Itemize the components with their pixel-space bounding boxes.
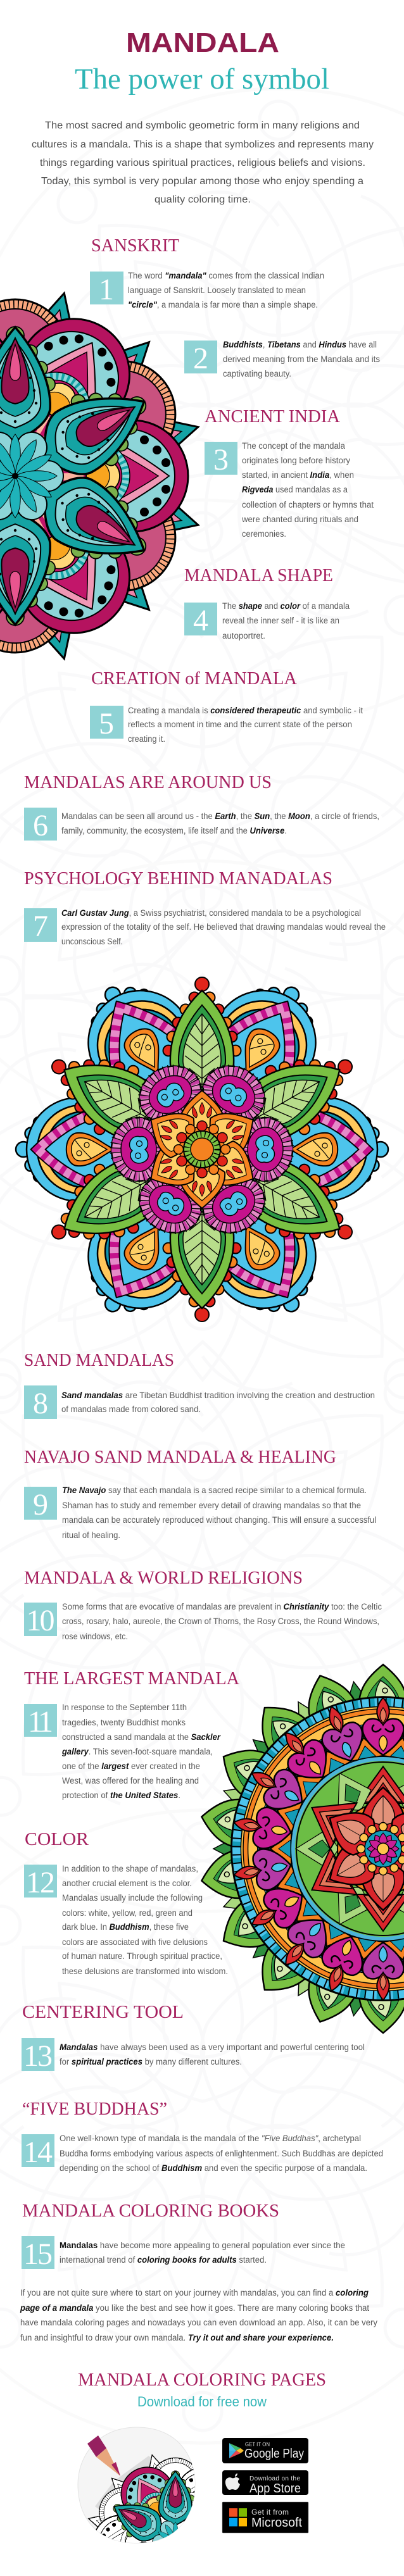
item 9 [24,1485,376,1540]
heading: Sand mandalas: SAND MANDALAS [24,1350,174,1370]
item 14: Buddha forms embodying various aspects of enlightenment. Such Buddhas are depicted [60,2149,383,2158]
item 6: Mandalas can be seen all around us - the Earth, the Sun, the Moon, a circle of friends, [61,811,379,821]
item 13: for spiritual practices by many different cultures. [60,2057,242,2066]
closing paragraph: page of a mandala you like the best and see how it goes. There are many coloring books that [20,2303,369,2313]
heading: Creation of mandala: CREATION of MANDALA [91,668,297,689]
item 11: tragedies, twenty Buddhist monks [62,1718,186,1727]
item 12: 12 [26,1866,55,1899]
item 11: protection of the United States. [62,1791,180,1800]
heading: Sanskrit: SANSKRIT [91,235,179,256]
item 12: these delusions are transformed into wisdom. [62,1966,228,1976]
icon: pencil [87,2435,120,2476]
item 8: 8 [33,1387,48,1420]
badge: Google Play: Google Play [244,2447,304,2461]
item 3: were chanted during rituals and [241,515,358,524]
item 14: One well-known type of mandala is the mandala of the "Five Buddhas", archetypal [60,2134,361,2143]
item 4: autoportret. [222,631,265,641]
intro paragraph: Today, this symbol is very popular among those who enjoy spending a [41,176,363,187]
item 11: one of the largest ever created in the [62,1761,200,1771]
item 1: "circle", a mandala is far more than a simple shape. [128,300,318,309]
item 7: Carl Gustav Jung, a Swiss psychiatrist, considered mandala to be a psychological [61,908,361,918]
item 15 [22,2236,345,2271]
heading: Mandala coloring books: MANDALA COLORING BOOKS [22,2201,279,2221]
heading: Navajo sand mandala and healing: NAVAJO SAND MANDALA & HEALING [24,1447,336,1467]
heading: Centering tool: CENTERING TOOL [22,2002,184,2022]
item 11: constructed a sand mandala at the Sackler [62,1732,221,1742]
item 12: colors are associated with five delusions [62,1937,208,1947]
badge: Microsoft [222,2502,308,2533]
item 13: Mandalas have always been used as a very important and powerful centering tool [60,2042,365,2052]
item 8 [24,1385,375,1420]
item 14: depending on the school of Buddhism and even the specific purpose of a mandala. [60,2163,367,2173]
badge: Google Play [222,2438,308,2463]
heading: Mandala coloring pages: MANDALA COLORING PAGES [78,2370,326,2390]
badge: Microsoft: Get it from [251,2508,289,2517]
item 8: Sand mandalas are Tibetan Buddhist tradition involving the creation and destruction [61,1391,375,1400]
item 7: unconscious Self. [61,937,123,946]
item 12: of human nature. Through spiritual practice, [62,1951,222,1961]
item 12: colors: white, yellow, red, green and [62,1908,193,1918]
item 12: In addition to the shape of mandalas, [62,1864,198,1873]
item 6: family, community, the ecosystem, life itself and the Universe. [61,826,287,835]
intro paragraph: quality coloring time. [155,194,251,205]
badge: Microsoft: Microsoft [251,2516,302,2530]
item 11: gallery. This seven-foot-square mandala, [61,1747,213,1756]
item 3: The concept of the mandala [242,441,345,451]
title: MANDALA [126,27,279,58]
item 15: Mandalas have become more appealing to general population ever since the [60,2241,345,2250]
heading: The largest mandala: THE LARGEST MANDALA [24,1668,239,1689]
closing paragraph [20,2288,377,2342]
item 11: West, was offered for the healing and [62,1776,199,1785]
illustration: mandala on right edge [198,1665,404,2033]
item 3: collection of chapters or hymns that [242,500,374,510]
item 9: ritual of healing. [62,1530,120,1540]
item 11 [24,1703,221,1800]
item 8: of mandalas made from colored sand. [61,1404,201,1414]
item 12: another crucial element is the color. [62,1879,192,1888]
item 14 [22,2134,383,2173]
item 3: ceremonies. [242,529,286,539]
heading: Mandalas are around us: MANDALAS ARE AROUND US [24,772,272,792]
badge: App Store: Download on the [249,2475,300,2482]
item 9: The Navajo say that each mandala is a sacred recipe similar to a chemical formula. [62,1485,367,1495]
heading: Ancient India: ANCIENT INDIA [205,406,340,427]
item 13 [22,2038,365,2073]
item 2 [184,340,380,378]
item 3: started, in ancient India, when [242,470,354,480]
item 4: 4 [193,604,208,637]
item 5: reflects a moment in time and the current state of the person [128,720,352,729]
item 4 [184,601,350,641]
intro paragraph: things regarding various spiritual practices, religious beliefs and visions. [40,158,365,168]
closing paragraph: If you are not quite sure where to start on your journey with mandalas, you can find a coloring [20,2288,369,2298]
item 10: rose windows, etc. [62,1632,128,1641]
item 3 [205,441,374,539]
item 2: derived meaning from the Mandala and its [223,354,380,364]
heading: Color: COLOR [25,1829,89,1849]
item 15: international trend of coloring books for adults started. [60,2255,267,2265]
item 10: 10 [27,1604,54,1637]
item 7: expression of the totality of the self. He believed that drawing mandalas would reveal the [61,922,386,932]
item 5 [90,706,363,744]
item 11: 11 [28,1705,53,1739]
item 12: dark blue. In Buddhism, these five [62,1922,189,1932]
item 4: reveal the inner self - it is like an [222,616,339,625]
illustration: rainbow mandala in centre [16,962,388,1337]
item 5: 5 [99,707,114,741]
item 15: 15 [23,2237,53,2271]
item 1: The word "mandala" comes from the classical Indian [128,271,324,280]
item 7: 7 [33,910,48,943]
item 1: 1 [99,273,114,306]
closing paragraph: fun and insightful to draw your own mandala. Try it out and share your experience. [20,2333,334,2342]
item 6: 6 [33,809,48,842]
item 2: Buddhists, Tibetans and Hindus have all [223,340,377,349]
item 9: 9 [33,1488,48,1522]
item 10 [24,1602,382,1641]
badge: Google Play: GET IT ON [245,2441,270,2448]
heading: Mandala and world religions: MANDALA & WORLD RELIGIONS [24,1568,303,1588]
subheading: download: Download for free now [137,2394,267,2410]
item 5: Creating a mandala is considered therapeutic and symbolic - it [128,706,363,715]
item 10: cross, rosary, halo, aureole, the Crown of Thorns, the Rosy Cross, the Round Windows, [62,1616,379,1626]
item 2: 2 [193,342,208,375]
item 12 [24,1864,228,1976]
heading: Mandala shape: MANDALA SHAPE [184,565,333,585]
illustration: teal and crimson mandala on left [0,287,204,665]
item 1: language of Sanskrit. Loosely translated to mean [128,285,306,295]
item 9: Shaman has to study and remember every detail of drawing mandalas so that the [62,1501,361,1510]
item 6 [24,808,379,842]
subtitle: The power of symbol [75,63,329,96]
heading: Psychology behind manadalas: PSYCHOLOGY BEHIND MANADALAS [24,868,332,889]
item 4: The shape and color of a mandala [222,601,350,611]
item 14: 14 [23,2135,53,2169]
item 1 [90,271,324,309]
item 12: Mandalas usually include the following [62,1893,203,1903]
item 9: mandala can be accurately reproduced without changing. This will ensure a successful [62,1515,376,1525]
badge: App Store [222,2470,308,2496]
item 5: creating it. [128,734,165,744]
closing paragraph: have mandala coloring pages and nowadays you can even download an app. Also, it can be very [20,2318,377,2327]
item 7 [24,908,386,946]
intro paragraph [32,120,374,205]
item 13: 13 [23,2039,53,2073]
intro paragraph: cultures is a mandala. This is a shape that symbolizes and represents many [32,139,374,150]
badge: App Store: App Store [249,2482,301,2496]
app icon [77,2427,243,2543]
item 11: In response to the September 11th [62,1703,187,1712]
item 2: captivating beauty. [223,369,291,378]
heading: Five Buddhas: “FIVE BUDDHAS” [22,2099,167,2119]
item 3: 3 [213,443,229,477]
item 10: Some forms that are evocative of mandalas are prevalent in Christianity too: the Celtic [62,1602,382,1611]
item 3: Rigveda used mandalas as a [242,485,348,494]
intro paragraph: The most sacred and symbolic geometric form in many religions and [45,120,360,131]
item 3: originates long before history [242,456,350,465]
